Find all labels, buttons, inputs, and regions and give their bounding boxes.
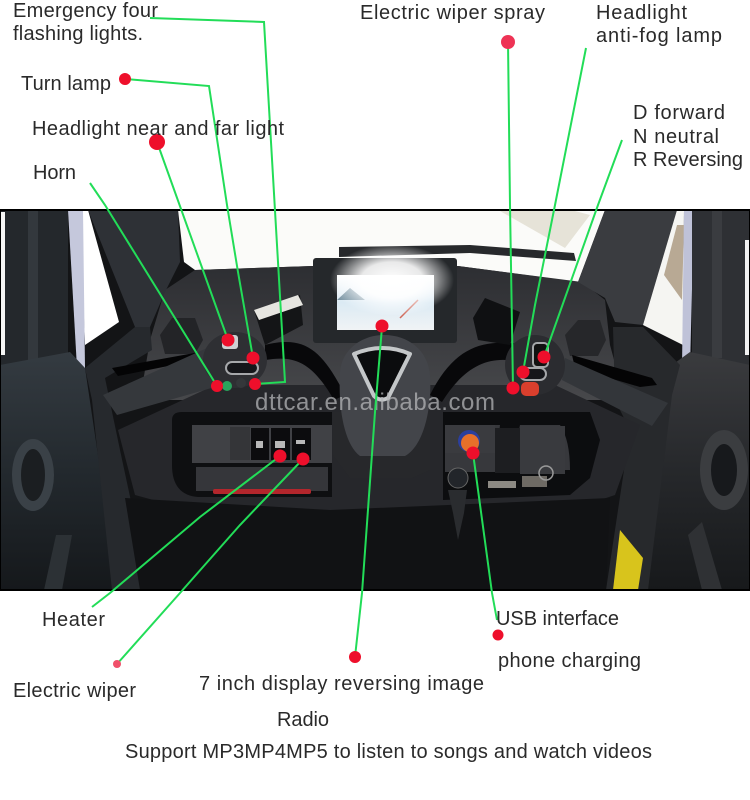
dashboard top	[140, 266, 625, 400]
left door speaker	[12, 439, 54, 511]
label: anti-fog lamp: anti-fog lamp	[596, 25, 722, 47]
label: media support: Support MP3MP4MP5 to listen to songs and watch videos	[125, 741, 652, 763]
label: phone charging: phone charging	[498, 650, 641, 672]
label: 7 inch display: 7 inch display reversing image	[199, 673, 484, 695]
screen glare	[330, 244, 454, 316]
label: headlight near and far light: Headlight near and far light	[32, 118, 284, 140]
right side window	[643, 210, 684, 345]
label: electric wiper: Electric wiper	[13, 680, 136, 702]
shelf	[118, 385, 640, 510]
left A-frame	[85, 327, 152, 590]
screen	[313, 258, 457, 343]
watermark: dttcar.en.alibaba.com	[255, 389, 495, 416]
right grip	[562, 358, 668, 426]
switch panel	[192, 425, 332, 463]
left brake lever	[112, 353, 196, 376]
left door panel	[1, 352, 110, 570]
callout dots	[113, 35, 550, 668]
yellow warning sticker	[613, 530, 643, 590]
right A-frame	[606, 327, 680, 590]
label: R Reversing: R Reversing	[633, 149, 743, 171]
switches	[230, 427, 311, 460]
lower black body	[125, 498, 610, 590]
label: N neutral: N neutral	[633, 126, 719, 148]
centre logo emblem	[354, 348, 410, 400]
left speaker grille	[160, 318, 203, 354]
handlebar right	[430, 343, 514, 402]
orange USB button	[458, 430, 480, 452]
label: headlight: Headlight	[596, 2, 687, 24]
left switch housing	[203, 332, 267, 391]
label: flashing lights: flashing lights.	[13, 23, 143, 45]
handlebar left	[265, 342, 345, 400]
red strip light	[213, 489, 311, 494]
label: turn lamp: Turn lamp	[21, 73, 111, 95]
left side window	[80, 210, 119, 345]
label: radio: Radio	[277, 709, 329, 731]
left grip	[103, 348, 222, 415]
right storage bay	[443, 412, 600, 500]
right pull handle	[688, 522, 722, 590]
label: horn: Horn	[33, 162, 76, 184]
left pillar	[88, 210, 180, 327]
left pull handle	[44, 535, 72, 590]
centre lower block	[333, 412, 430, 478]
photo border	[0, 210, 750, 590]
photo: vehicle interior dashboard	[0, 210, 750, 590]
label: electric wiper spray: Electric wiper spray	[360, 2, 545, 24]
right brake lever	[572, 355, 657, 387]
centre steering column	[340, 335, 430, 456]
right speaker grille	[565, 320, 606, 356]
right door panel	[652, 352, 749, 566]
left mirror box	[254, 295, 303, 345]
right door speaker	[700, 430, 748, 510]
left storage bay	[172, 412, 332, 497]
right switch housing	[505, 335, 565, 396]
windshield	[178, 210, 605, 282]
callout lines	[90, 18, 622, 664]
label: emergency four flashing lights: Emergency four	[13, 0, 158, 22]
wiper blade	[339, 245, 576, 261]
label: D forward: D forward	[633, 102, 725, 124]
label: USB interface: USB interface	[496, 608, 619, 630]
right pillar	[578, 210, 677, 325]
label: heater: Heater	[42, 609, 105, 631]
keys	[448, 466, 553, 540]
right mirror box	[473, 298, 520, 345]
